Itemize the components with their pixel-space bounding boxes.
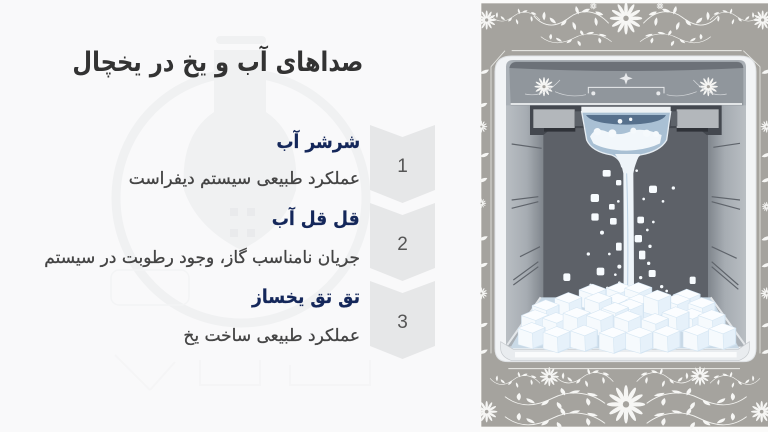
control header	[509, 62, 743, 105]
text 2: جریان نامناسب گاز، وجود رطوبت در سیستم	[44, 248, 360, 268]
heading 2: قل قل آب	[272, 208, 360, 230]
back wall	[543, 128, 708, 298]
falling ice particles	[563, 169, 696, 292]
chevron 3: 3	[397, 312, 408, 333]
side brackets	[533, 109, 719, 128]
compartment interior: side walls	[506, 60, 746, 347]
top shadow band	[530, 105, 722, 135]
ornamental frame background	[480, 0, 768, 432]
outer white fridge frame	[495, 56, 756, 362]
water tray	[581, 107, 671, 167]
title: صداهای آب و یخ در یخچال	[72, 47, 363, 78]
background watermark: flask logo	[112, 36, 370, 328]
chevron 2	[370, 203, 435, 281]
heading 1: شرشر آب	[276, 131, 360, 153]
chevron 3	[370, 281, 435, 359]
text 1: عملکرد طبیعی سیستم دیفراست	[129, 169, 360, 189]
side floral ornaments	[475, 70, 768, 354]
chevron 1: 1	[397, 156, 408, 177]
heading 3: تق تق یخساز	[252, 286, 360, 308]
illustration: fridge ice dispenser	[480, 3, 768, 427]
top floral band	[477, 2, 768, 51]
text 3: عملکرد طبیعی ساخت یخ	[183, 326, 360, 346]
chevron list	[370, 125, 435, 359]
water stream	[615, 154, 640, 307]
side wall rails	[512, 143, 740, 289]
chevron 1	[370, 125, 435, 203]
tray floor and lip	[501, 297, 749, 361]
chevron 2: 2	[397, 234, 408, 255]
bottom floral band	[476, 366, 768, 429]
ice cubes pile	[518, 283, 736, 353]
frame outline strokes	[491, 51, 760, 353]
